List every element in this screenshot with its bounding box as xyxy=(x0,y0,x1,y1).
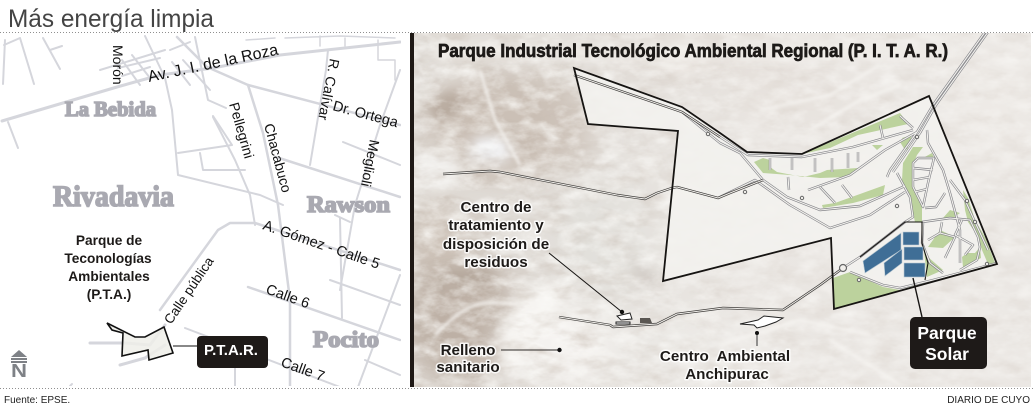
street labels: Calle 6 xyxy=(264,282,312,312)
leader line: treatment centre xyxy=(549,253,622,312)
label: Anchipurac: Anchipurac xyxy=(685,366,769,383)
satellite background xyxy=(400,33,1031,408)
place label: Rivadavia: Rivadavia xyxy=(53,180,174,213)
street labels: Dr. Ortega xyxy=(331,98,401,131)
source: Fuente: EPSE. xyxy=(4,395,70,406)
street labels: Calle pública xyxy=(161,254,217,327)
leader line P.T.A.R. xyxy=(173,345,197,347)
panel: street map xyxy=(2,36,401,408)
place label: Rawson: Rawson xyxy=(307,192,390,217)
label: treatment centre: residuos xyxy=(464,254,528,271)
callout: Parque Solar: Parque xyxy=(917,323,977,343)
place label: La Bebida: La Bebida xyxy=(65,97,156,121)
callout: P.T.A.R. xyxy=(197,336,268,368)
street network xyxy=(2,36,400,408)
solar panels xyxy=(863,232,925,277)
panel: satellite map xyxy=(400,32,1031,408)
place label: Pocito: Pocito xyxy=(313,327,379,352)
green zones xyxy=(754,113,997,309)
callout: P.T.A.R.: P.T.A.R. xyxy=(204,342,258,359)
street labels: Meglioli xyxy=(358,138,383,188)
callout: Parque Solar: Solar xyxy=(925,344,969,364)
leader line: Anchipurac xyxy=(755,331,759,346)
access roads xyxy=(443,75,843,327)
title glow xyxy=(442,41,770,63)
heading: P.I.T.A.R.: Parque Industrial Tecnológico Ambiental Regional (P. I. T. A. R.) xyxy=(438,41,948,61)
label: P.T.A.: Ambientales xyxy=(68,269,150,284)
street labels: Morón xyxy=(110,45,126,85)
street labels: R. Calívar xyxy=(315,57,343,122)
label: P.T.A.: Parque de xyxy=(76,233,142,248)
label: Anchipurac: Centro Ambiental xyxy=(660,348,790,365)
Anchipurac building xyxy=(740,316,783,328)
label: P.T.A.: Teconologías xyxy=(64,251,152,266)
street labels: Chacabuco xyxy=(261,122,295,194)
site boundary xyxy=(574,68,997,309)
leader line: Parque Solar xyxy=(913,278,922,317)
icon: north arrow xyxy=(11,350,27,381)
internal road network xyxy=(677,32,997,288)
label: treatment centre: tratamiento y xyxy=(448,217,544,234)
street labels: A. Gómez - Calle 5 xyxy=(261,218,382,273)
treatment centre buildings xyxy=(616,310,652,324)
street labels xyxy=(110,42,401,385)
solar park parcel outline xyxy=(860,222,928,280)
icon: north arrow: N xyxy=(11,361,27,381)
title: Más energía limpia xyxy=(8,5,214,33)
credit: DIARIO DE CUYO xyxy=(947,395,1030,406)
label: treatment centre: Centro de xyxy=(461,199,531,216)
small roundabouts xyxy=(706,132,989,282)
callout: Parque Solar xyxy=(910,317,987,369)
leader line: landfill xyxy=(501,348,562,352)
street labels: Av. J. I. de la Roza xyxy=(146,42,280,86)
panel divider xyxy=(410,33,414,387)
label: landfill: Relleno xyxy=(441,342,495,359)
label: landfill: sanitario xyxy=(436,359,500,376)
roundabout xyxy=(840,264,846,272)
street labels: Calle 7 xyxy=(279,355,327,385)
label: treatment centre: disposición de xyxy=(443,236,549,253)
P.I.T.A.R. site area xyxy=(574,68,997,309)
street labels: Pellegrini xyxy=(226,100,257,160)
P.T.A. boundary xyxy=(107,323,173,360)
label: P.T.A.: (P.T.A.) xyxy=(87,287,131,302)
